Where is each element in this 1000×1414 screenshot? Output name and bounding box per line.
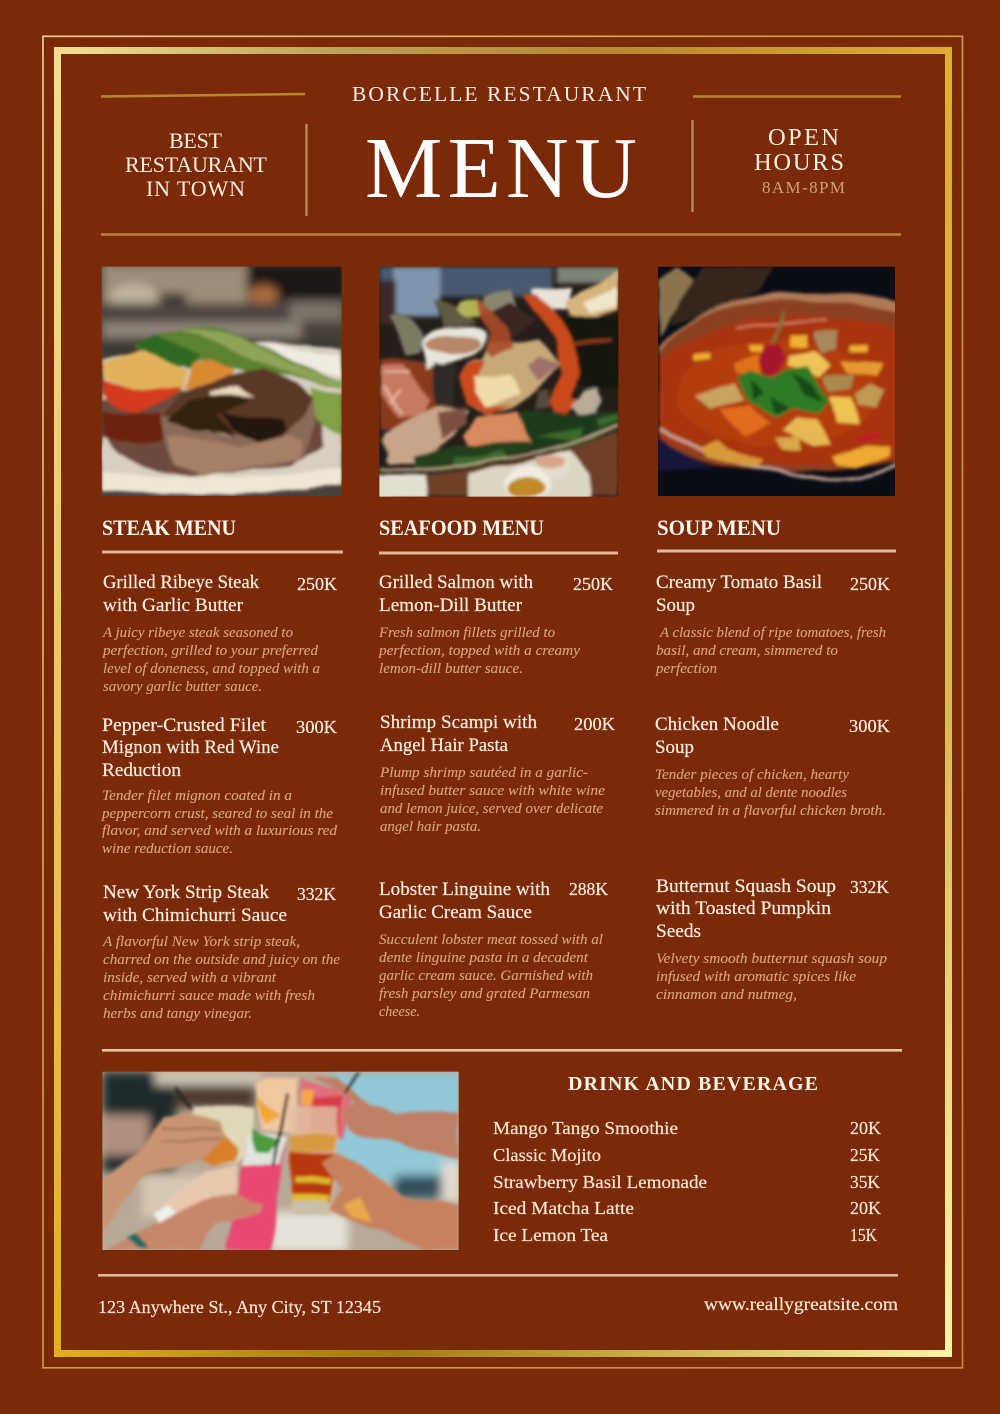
- drink list: Classic Mojito: [493, 1145, 601, 1165]
- item: lobster linguine: cheese.: [379, 1004, 420, 1020]
- item: shrimp scampi: infused butter sauce with white wine: [380, 783, 606, 799]
- item: ribeye: Grilled Ribeye Steak: [103, 573, 260, 593]
- item: lobster linguine: fresh parsley and grated Parmesan: [379, 986, 590, 1002]
- drink list: 20K: [850, 1198, 881, 1218]
- panel: drinks and beverage: [493, 1073, 881, 1245]
- item: ribeye: 250K: [297, 574, 337, 594]
- item: strip steak: New York Strip Steak: [103, 883, 270, 903]
- item: ribeye: A juicy ribeye steak seasoned to: [102, 625, 293, 641]
- item: salmon: lemon-dill butter sauce.: [379, 661, 523, 677]
- drink list: Iced Matcha Latte: [493, 1198, 634, 1218]
- item: butternut squash: cinnamon and nutmeg,: [656, 987, 797, 1003]
- item: filet mignon: Tender filet mignon coated in a: [102, 788, 292, 804]
- item: chicken noodle: Tender pieces of chicken, hearty: [655, 767, 850, 783]
- drink list: 20K: [850, 1118, 881, 1138]
- item: filet mignon: flavor, and served with a luxurious red: [102, 823, 338, 839]
- item: butternut squash: infused with aromatic spices like: [656, 969, 857, 985]
- item: strip steak: 332K: [297, 884, 336, 904]
- drink list: [493, 1118, 881, 1245]
- item: salmon: Fresh salmon fillets grilled to: [378, 625, 555, 641]
- drink list: Ice Lemon Tea: [493, 1225, 608, 1245]
- opening hours: [754, 124, 845, 197]
- item: butternut squash: Velvety smooth butternut squash soup: [656, 951, 887, 967]
- item: ribeye: level of doneness, and topped with a: [103, 661, 320, 677]
- item: strip steak: inside, served with a vibrant: [103, 970, 277, 986]
- heading: SOUP MENU: [657, 515, 781, 540]
- item: lobster linguine: [379, 879, 608, 1020]
- drink list: 25K: [850, 1145, 880, 1165]
- item: tomato basil: perfection: [655, 661, 717, 677]
- item: salmon: [378, 573, 613, 677]
- item: filet mignon: Mignon with Red Wine: [102, 738, 279, 758]
- item: ribeye: savory garlic butter sauce.: [103, 679, 262, 695]
- footer: website: www.reallygreatsite.com: [704, 1294, 898, 1314]
- item: strip steak: [102, 883, 341, 1022]
- item: chicken noodle: 300K: [849, 716, 890, 736]
- item: ribeye: [102, 573, 337, 695]
- photo: seafood platter: [377, 267, 620, 500]
- panel: soup menu: [655, 515, 896, 1003]
- item: filet mignon: Reduction: [102, 761, 181, 781]
- item: lobster linguine: 288K: [569, 879, 608, 899]
- tagline: IN TOWN: [146, 176, 245, 201]
- item: tomato basil: 250K: [850, 574, 890, 594]
- item: chicken noodle: vegetables, and al dente noodles: [655, 785, 847, 801]
- item: ribeye: with Garlic Butter: [103, 596, 243, 616]
- item: shrimp scampi: 200K: [574, 714, 615, 734]
- panel: steak menu: [101, 515, 343, 1022]
- opening hours: HOURS: [754, 149, 844, 176]
- item: strip steak: herbs and tangy vinegar.: [103, 1006, 252, 1022]
- item: filet mignon: Pepper-Crusted Filet: [102, 716, 267, 736]
- item: butternut squash: Butternut Squash Soup: [656, 877, 836, 897]
- item: strip steak: charred on the outside and juicy on the: [103, 952, 341, 968]
- item: chicken noodle: Chicken Noodle: [655, 715, 779, 735]
- item: shrimp scampi: [379, 713, 615, 835]
- header: [101, 82, 901, 234]
- main title: MENU: [365, 119, 637, 216]
- item: chicken noodle: Soup: [655, 738, 694, 758]
- item: filet mignon: wine reduction sauce.: [102, 841, 233, 857]
- item: tomato basil: A classic blend of ripe tomatoes, fresh: [659, 625, 886, 641]
- photo: drinks toast: [102, 1072, 462, 1252]
- footer: address: 123 Anywhere St., Any City, ST 12345: [98, 1297, 381, 1317]
- item: butternut squash: [656, 877, 889, 1003]
- item: strip steak: with Chimichurri Sauce: [103, 906, 287, 926]
- panel: seafood menu: [378, 515, 618, 1020]
- item: butternut squash: Seeds: [656, 922, 701, 942]
- item: salmon: Grilled Salmon with: [379, 573, 533, 593]
- restaurant name: BORCELLE RESTAURANT: [352, 82, 646, 106]
- item: salmon: 250K: [573, 574, 613, 594]
- item: chicken noodle: [655, 715, 890, 819]
- heading: STEAK MENU: [102, 515, 236, 540]
- tagline: [125, 128, 268, 201]
- item: lobster linguine: Lobster Linguine with: [379, 880, 550, 900]
- opening hours: OPEN: [768, 124, 839, 151]
- photo: steak: [101, 263, 347, 496]
- heading: SEAFOOD MENU: [379, 515, 544, 540]
- drink list: Strawberry Basil Lemonade: [493, 1172, 707, 1192]
- item: strip steak: A flavorful New York strip steak,: [102, 934, 300, 950]
- item: shrimp scampi: Shrimp Scampi with: [380, 713, 537, 733]
- item: strip steak: chimichurri sauce made with fresh: [103, 988, 315, 1004]
- item: tomato basil: Creamy Tomato Basil: [656, 573, 822, 593]
- heading: DRINK AND BEVERAGE: [568, 1073, 818, 1095]
- opening hours: 8AM-8PM: [762, 178, 845, 197]
- item: shrimp scampi: Angel Hair Pasta: [380, 736, 508, 756]
- item: tomato basil: Soup: [656, 596, 695, 616]
- item: tomato basil: [655, 573, 890, 677]
- item: salmon: Lemon-Dill Butter: [379, 596, 522, 616]
- item: shrimp scampi: Plump shrimp sautéed in a garlic-: [379, 765, 588, 781]
- item: lobster linguine: Garlic Cream Sauce: [379, 903, 532, 923]
- item: ribeye: perfection, grilled to your preferred: [102, 643, 319, 659]
- item: salmon: perfection, topped with a creamy: [378, 643, 581, 659]
- tagline: BEST: [169, 128, 223, 153]
- item: lobster linguine: dente linguine pasta in a decadent: [379, 950, 589, 966]
- item: lobster linguine: Succulent lobster meat tossed with al: [379, 932, 603, 948]
- item: shrimp scampi: angel hair pasta.: [380, 819, 481, 835]
- tagline: RESTAURANT: [125, 152, 268, 177]
- item: tomato basil: basil, and cream, simmered to: [656, 643, 838, 659]
- item: shrimp scampi: and lemon juice, served over delicate: [380, 801, 604, 817]
- drink list: Mango Tango Smoothie: [493, 1118, 678, 1138]
- drink list: 15K: [850, 1225, 877, 1245]
- item: filet mignon: 300K: [296, 717, 337, 737]
- item: butternut squash: with Toasted Pumpkin: [656, 899, 831, 919]
- item: chicken noodle: simmered in a flavorful chicken broth.: [655, 803, 886, 819]
- item: butternut squash: 332K: [850, 877, 889, 897]
- item: lobster linguine: garlic cream sauce. Garnished with: [379, 968, 593, 984]
- drink list: 35K: [850, 1172, 880, 1192]
- item: filet mignon: [101, 716, 338, 857]
- photo: tomato soup: [657, 267, 903, 496]
- item: filet mignon: peppercorn crust, seared to seal in the: [101, 806, 334, 822]
